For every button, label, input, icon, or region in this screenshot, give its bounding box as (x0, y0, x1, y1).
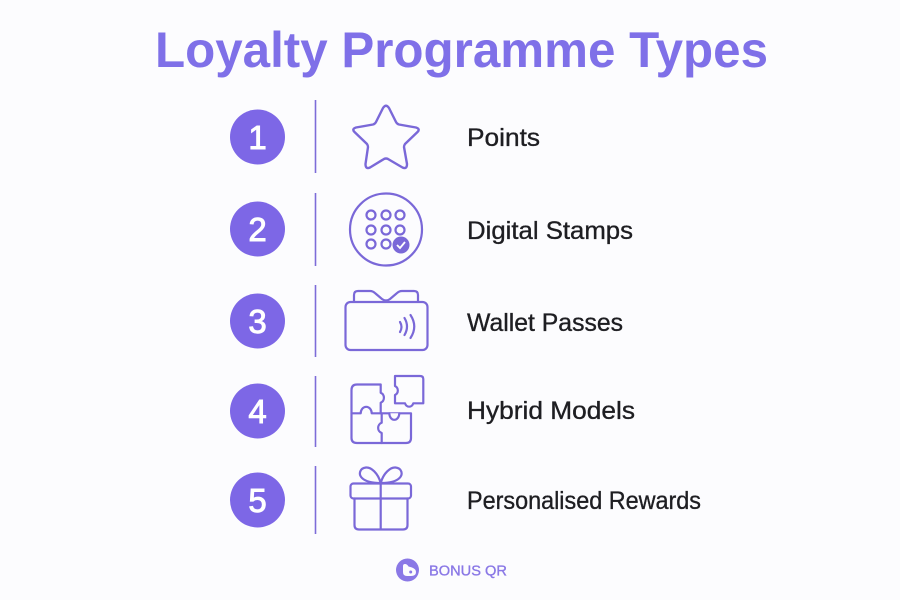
icon: wallet (346, 291, 428, 350)
number badge 1: 1 (248, 119, 267, 156)
number badge 2 (230, 202, 285, 256)
row 1: points (230, 100, 540, 173)
label: points: Points (467, 124, 540, 152)
logo: Bonus QR (396, 558, 507, 582)
logo wordmark: BONUS QR (429, 562, 507, 580)
row 5: personalised rewards (230, 466, 701, 534)
icon: puzzle (352, 376, 423, 443)
divider 3 (314, 285, 316, 357)
label: personalised rewards: Personalised Rewards (467, 487, 701, 515)
row 2: digital stamps (230, 193, 633, 266)
label: digital stamps: Digital Stamps (467, 217, 633, 245)
row 4: hybrid models (230, 376, 635, 447)
icon: logo mark (396, 558, 419, 582)
divider 5 (314, 466, 316, 534)
number badge 3: 3 (248, 303, 267, 340)
divider 4 (314, 376, 316, 447)
number badge 4: 4 (248, 393, 267, 430)
number badge 2: 2 (248, 211, 267, 248)
icon: star (353, 106, 419, 168)
label: wallet passes: Wallet Passes (467, 309, 623, 337)
number badge 5: 5 (248, 482, 267, 519)
title: Loyalty Programme Types (155, 22, 768, 78)
number badge 5 (230, 472, 285, 528)
icon: gift (350, 467, 411, 530)
icon: stamp card (350, 194, 422, 266)
divider 2 (314, 193, 316, 266)
number badge 1 (230, 110, 285, 164)
divider 1 (314, 100, 316, 173)
number badge 4 (230, 384, 285, 438)
label: hybrid models: Hybrid Models (467, 397, 635, 425)
row 3: wallet passes (230, 285, 623, 357)
number badge 3 (230, 294, 285, 348)
